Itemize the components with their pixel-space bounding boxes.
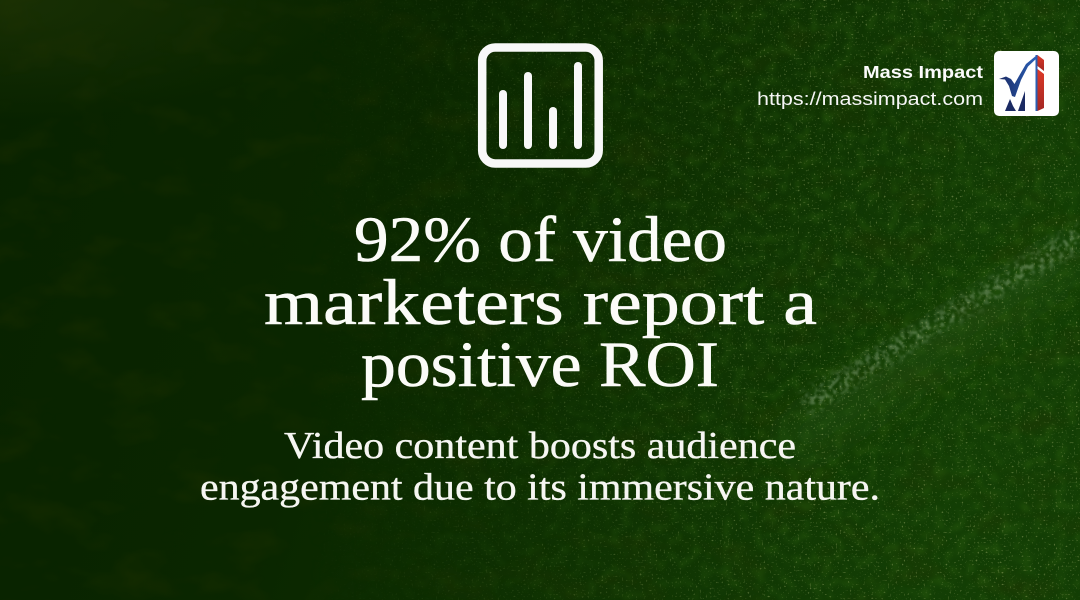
subtitle: Video content boosts audience [284, 425, 796, 467]
title: positive ROI [361, 329, 719, 401]
logo: Mass Impact [994, 51, 1059, 116]
title: 92% of video [354, 204, 727, 276]
icon: bar chart in rounded square [482, 48, 599, 164]
brand url: https://massimpact.com [757, 88, 983, 109]
subtitle [200, 425, 880, 508]
title: marketers report a [264, 267, 817, 339]
brand name: Mass Impact [863, 62, 983, 82]
subtitle: engagement due to its immersive nature. [200, 466, 880, 508]
title [264, 204, 817, 401]
